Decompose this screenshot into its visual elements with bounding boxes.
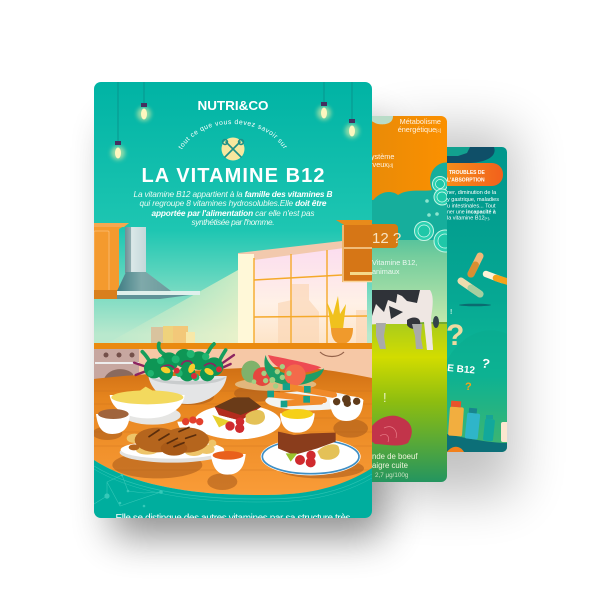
question box: B12: 12 ? — [372, 230, 401, 247]
question marks: ? — [480, 355, 491, 372]
mash bowl — [110, 387, 185, 425]
label: métabolisme: Métabolisme — [400, 117, 441, 126]
question marks — [446, 309, 491, 393]
title: LA VITAMINE B12 — [142, 165, 324, 187]
food items — [92, 343, 368, 490]
pendant lights — [111, 82, 359, 160]
right cabinet — [336, 220, 372, 282]
stove — [94, 349, 139, 379]
body text: ner une incapacité à — [447, 210, 496, 216]
body text: animaux — [372, 267, 400, 276]
label: métabolisme: énergétique[c] — [398, 125, 441, 134]
sauce bowl — [96, 409, 130, 434]
logo: NUTRI&CO — [198, 99, 269, 113]
drawer handle — [320, 352, 344, 356]
body text: y gastrique, maladies — [447, 197, 499, 203]
icon: supplement bottles — [447, 401, 509, 452]
teal clouds — [370, 162, 450, 240]
question marks: ! — [450, 309, 452, 316]
teal base with network — [94, 460, 372, 518]
window — [238, 241, 367, 344]
intro text: apportée par l'alimentation car elle n'est pas — [152, 208, 314, 218]
intro text: synthétisée par l'homme. — [192, 217, 274, 227]
label: système nerveux: Système — [366, 152, 394, 161]
chicken plate — [120, 427, 225, 463]
fruit platter — [235, 355, 324, 391]
icon: crossed spoon and fork — [222, 138, 244, 160]
text: quantity: ! — [383, 390, 387, 405]
body text: la vitamine B12[+]. — [447, 216, 491, 222]
field — [372, 322, 447, 482]
drop shadow — [112, 125, 515, 537]
left cabinet — [94, 223, 129, 299]
illustration: beef — [370, 416, 412, 446]
body text: Vitamine B12, — [372, 258, 417, 267]
body text — [372, 260, 417, 274]
label: métabolisme — [398, 118, 441, 134]
beef caption: nde de boeuf — [372, 452, 418, 461]
heading pill: L'ABSORPTION — [447, 178, 485, 184]
table — [94, 367, 372, 495]
light beam — [125, 270, 238, 343]
canisters — [151, 326, 195, 343]
question marks: ? — [465, 381, 472, 393]
illustration: cow — [372, 290, 439, 350]
olive bowl — [329, 395, 363, 421]
cut-off paragraph: Elle se distingue des autres vitamines par sa structure très — [116, 513, 350, 524]
body text: ner, diminution de la — [447, 190, 497, 196]
carrot plate — [265, 383, 356, 410]
body text — [447, 190, 499, 222]
plant — [327, 296, 346, 329]
beef plate — [261, 432, 361, 475]
infographic mockup: three stacked cards — [85, 82, 542, 564]
heading fragment: E B12 — [447, 363, 476, 376]
background — [94, 82, 372, 518]
label: système nerveux — [372, 154, 394, 168]
corn bowl — [280, 409, 315, 433]
shadows — [92, 385, 368, 490]
heading pill — [447, 163, 503, 186]
range hood — [117, 227, 200, 299]
steak plate — [194, 397, 281, 439]
tomato bowl — [177, 416, 209, 435]
intro text: La vitamine B12 appartient à la famille des vitamines B — [134, 189, 332, 199]
carrot bowl — [211, 451, 246, 475]
question marks: ? — [446, 319, 464, 352]
cells — [414, 176, 447, 252]
salad bowl — [134, 343, 234, 404]
heading pill: TROUBLES DE — [449, 170, 486, 176]
label: système nerveux: nerveux[d] — [362, 160, 393, 169]
curved subtitle: tout ce que vous devez savoir sur — [178, 119, 287, 149]
body text: u intestinales... Tout — [447, 204, 496, 210]
card 2: métabolisme et sources animales — [372, 116, 447, 482]
skyline — [278, 284, 367, 343]
counter — [94, 343, 372, 349]
card 3: troubles de l'absorption — [447, 147, 507, 452]
beef caption: 2,7 μg/100g — [375, 472, 409, 479]
kitchen scene — [92, 220, 372, 524]
icon: pills — [461, 256, 512, 294]
card 1: main cover — [94, 82, 372, 518]
intro text: qui regroupe 8 vitamines hydrosolubles.Elle doit être — [140, 198, 327, 208]
beef caption: aigre cuite — [372, 461, 408, 470]
intro text — [134, 189, 332, 227]
beef caption — [372, 452, 418, 479]
